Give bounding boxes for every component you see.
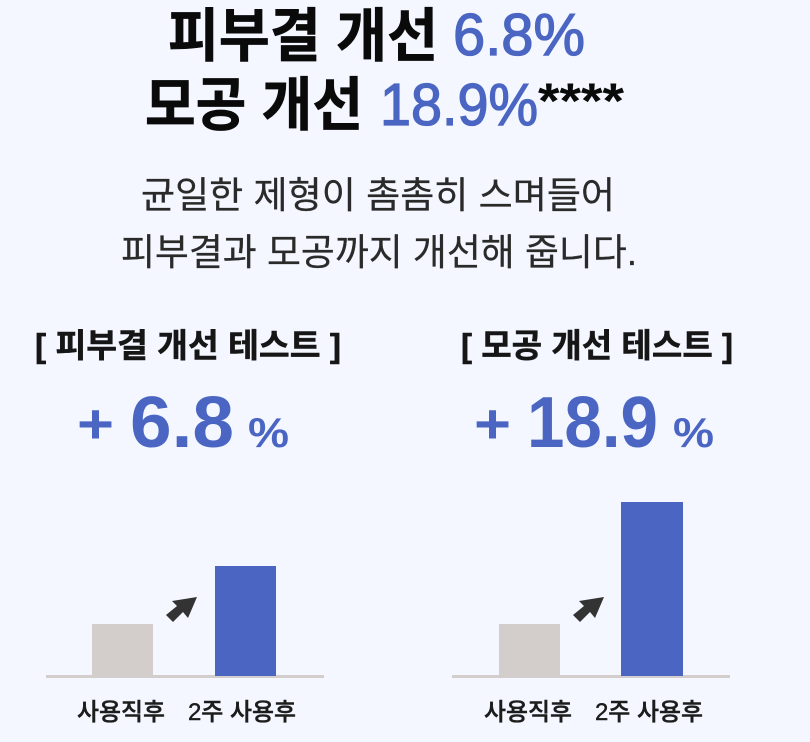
heading: pore test: [ 모공 개선 테스트 ]: [461, 327, 733, 364]
arrow: [573, 597, 604, 622]
value: plus 6.8 percent: %: [248, 409, 289, 456]
value: plus 18.9 percent: [474, 383, 714, 463]
value: plus 6.8 percent: +: [77, 392, 114, 455]
value: plus 6.8 percent: 6.8: [130, 383, 234, 463]
bar chart: skin texture: 사용직후: [77, 699, 165, 726]
title: 18.9%: [380, 72, 538, 138]
panel: skin texture test: [35, 327, 341, 726]
title: 모공 개선: [145, 73, 363, 138]
title: [145, 2, 625, 138]
bar chart: skin texture: 2주 사용후: [188, 699, 296, 726]
value: plus 18.9 percent: %: [673, 409, 714, 456]
title: 6.8%: [453, 2, 585, 68]
arrow: [166, 597, 197, 622]
bar chart: pores: 사용직후: [484, 699, 572, 726]
bar chart: pores: [452, 502, 730, 726]
title: 피부결 개선: [168, 4, 438, 69]
title: ****: [538, 73, 625, 129]
panel: pore test: [452, 327, 733, 726]
subtitle text: [121, 175, 637, 273]
subtitle text: 피부결과 모공까지 개선해 줍니다.: [121, 232, 637, 273]
subtitle text: 균일한 제형이 촘촘히 스며들어: [141, 175, 615, 216]
value: plus 18.9 percent: +: [474, 392, 511, 455]
value: plus 18.9 percent: 18.9: [527, 383, 658, 463]
heading: skin texture test: [ 피부결 개선 테스트 ]: [35, 327, 341, 364]
bar chart: skin texture: [46, 566, 324, 726]
bar chart: pores: 2주 사용후: [595, 699, 703, 726]
value: plus 6.8 percent: [77, 383, 289, 463]
